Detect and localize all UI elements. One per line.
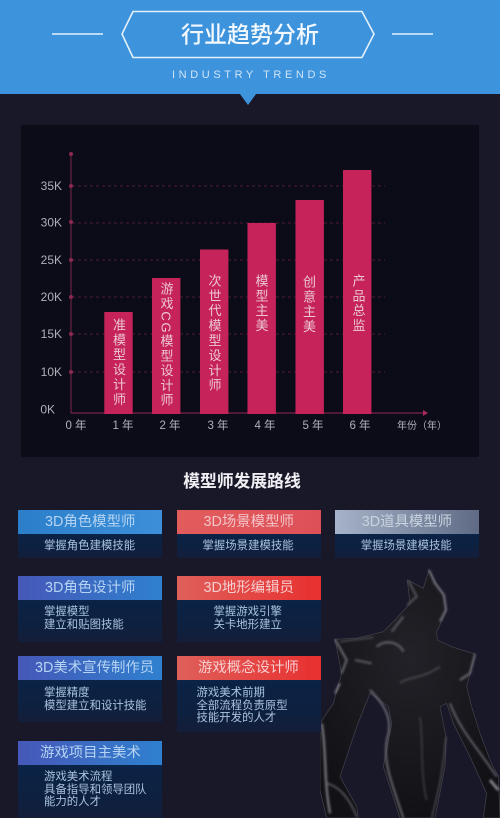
card: 3D地形编辑员: 3D地形编辑员 bbox=[204, 580, 294, 596]
card: 3D角色设计师: 3D角色设计师 bbox=[45, 580, 135, 596]
card: 3D角色模型师: 3D角色模型师 bbox=[45, 514, 135, 530]
card: 3D美术宣传制作员 bbox=[18, 656, 162, 722]
card: 3D道具模型师: 掌握场景建模技能 bbox=[361, 540, 452, 552]
card: 游戏概念设计师: 游戏概念设计师 bbox=[198, 660, 299, 676]
bar labels bbox=[111, 273, 366, 408]
x axis labels: 3 年 bbox=[207, 418, 229, 432]
y axis labels: 10K bbox=[41, 365, 62, 379]
bar labels: 准模型设计师 bbox=[111, 318, 126, 407]
card: 3D道具模型师 bbox=[335, 510, 479, 558]
x axis labels: 4 年 bbox=[254, 418, 276, 432]
x axis labels: 1 年 bbox=[112, 418, 134, 432]
x axis labels: 5 年 bbox=[302, 418, 324, 432]
card: 3D角色模型师: 掌握角色建模技能 bbox=[44, 540, 135, 552]
figure: dark creature character bbox=[320, 569, 500, 818]
card: 3D地形编辑员: 关卡地形建立 bbox=[214, 619, 282, 631]
icon: header pointer triangle bbox=[240, 94, 256, 105]
card: 游戏概念设计师: 技能开发的人才 bbox=[196, 712, 276, 724]
card: 游戏项目主美术: 游戏美术流程 bbox=[44, 771, 112, 783]
card: 游戏项目主美术: 游戏项目主美术 bbox=[40, 745, 141, 761]
card: 游戏概念设计师: 全部流程负责原型 bbox=[196, 700, 288, 712]
card: 游戏概念设计师 bbox=[177, 656, 321, 732]
bar labels: 模型主美 bbox=[254, 274, 268, 334]
x axis labels: 年份（年） bbox=[397, 419, 447, 432]
card: 3D美术宣传制作员: 模型建立和设计技能 bbox=[44, 700, 147, 712]
bar labels: 创意主美 bbox=[301, 275, 316, 335]
header band bbox=[0, 0, 500, 94]
title frame and title: INDUSTRY TRENDS bbox=[172, 69, 330, 81]
bar labels: 次世代模型设计师 bbox=[206, 273, 222, 393]
card: 3D角色模型师 bbox=[18, 510, 162, 558]
card: 3D角色设计师 bbox=[18, 576, 162, 642]
card: 3D地形编辑员: 掌握游戏引擎 bbox=[214, 606, 282, 618]
bar labels: 游戏CG模型设计师 bbox=[158, 282, 174, 408]
card: 游戏项目主美术 bbox=[18, 741, 162, 818]
card: 3D美术宣传制作员: 掌握精度 bbox=[44, 687, 90, 699]
y axis labels: 20K bbox=[41, 290, 62, 304]
card: 3D美术宣传制作员: 3D美术宣传制作员 bbox=[35, 660, 154, 676]
card: 3D场景模型师: 3D场景模型师 bbox=[204, 514, 294, 530]
card: 游戏项目主美术: 具备指导和领导团队 bbox=[44, 784, 147, 796]
title frame and title: 行业趋势分析 bbox=[181, 22, 319, 48]
card: 3D场景模型师: 掌握场景建模技能 bbox=[202, 540, 294, 552]
x axis labels: 2 年 bbox=[159, 418, 181, 432]
y axis labels bbox=[40, 179, 62, 416]
card: 3D角色设计师: 建立和贴图技能 bbox=[44, 619, 124, 631]
y axis labels: 0K bbox=[40, 402, 55, 416]
panel: bar chart bbox=[21, 125, 479, 457]
y axis labels: 15K bbox=[41, 327, 62, 341]
card: 3D场景模型师 bbox=[177, 510, 321, 558]
bar labels: 产品总监 bbox=[350, 274, 366, 334]
y axis labels: 30K bbox=[41, 216, 62, 230]
card: 3D地形编辑员 bbox=[177, 576, 321, 642]
card: 3D角色设计师: 掌握模型 bbox=[44, 606, 90, 618]
card: 游戏项目主美术: 能力的人才 bbox=[44, 796, 101, 808]
chart axes bbox=[69, 152, 428, 416]
bars bbox=[104, 170, 371, 414]
y axis labels: 35K bbox=[41, 179, 62, 193]
card: 游戏概念设计师: 游戏美术前期 bbox=[196, 687, 265, 699]
heading: career path: 模型师发展路线 bbox=[183, 472, 301, 491]
x axis labels bbox=[65, 418, 447, 432]
x axis labels: 6 年 bbox=[349, 418, 371, 432]
y axis labels: 25K bbox=[41, 253, 62, 267]
x axis labels: 0 年 bbox=[65, 418, 87, 432]
card: 3D道具模型师: 3D道具模型师 bbox=[362, 514, 452, 530]
title frame and title bbox=[52, 10, 433, 81]
